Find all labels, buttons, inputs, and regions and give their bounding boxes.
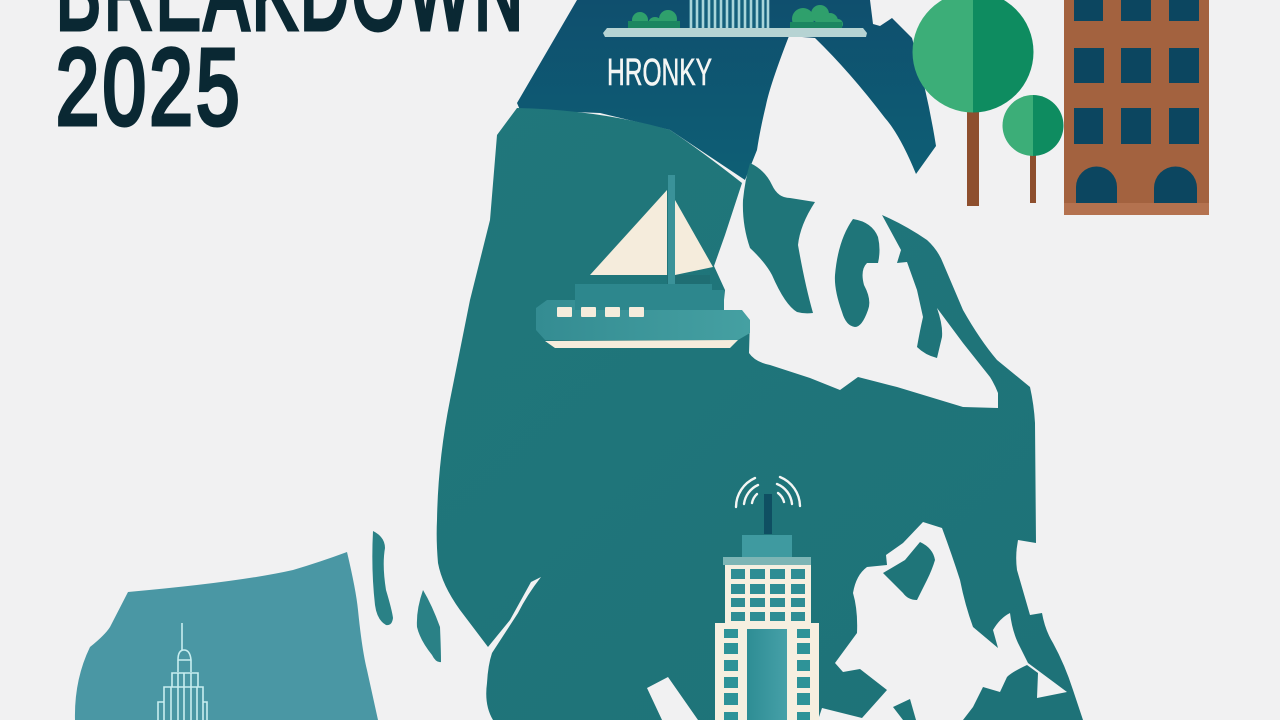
hull [536,300,750,340]
icon: tower with signal [715,477,819,720]
icon: ship with sail [536,175,750,348]
map: small western island [372,531,393,625]
map: white river strip [647,677,698,720]
cabin [575,284,724,312]
terrace slab [603,28,867,37]
map: island two [835,219,880,327]
map: lagoon [883,542,935,600]
map: southwest region [75,552,378,720]
upper body [725,565,811,625]
windows [557,307,644,317]
mast [668,175,675,284]
map: small inlet [893,699,916,720]
icon: tree small [1003,95,1063,203]
bushes left [628,10,680,31]
map: central white island [818,522,1067,720]
map: small western island lower [417,590,441,662]
ledge [723,557,811,565]
left sail [590,190,667,275]
icon: top terrace with building [603,0,867,37]
signal arcs [736,477,800,507]
label on map: HRONKY [607,52,712,94]
icon: brick building [1064,0,1209,215]
icon: outlined skyscraper [158,623,207,720]
bushes right [790,5,843,30]
lower body [715,623,819,720]
right sail [675,200,713,275]
map: main teal landmass [437,108,1083,720]
side windows [724,629,810,720]
upper windows [731,569,805,621]
upper deck [667,275,710,284]
icon: tree large [912,0,1033,206]
crown [742,535,792,557]
keel stripe [545,340,738,348]
map: island one [743,163,815,313]
colonnade building [689,0,769,28]
center panel [747,629,787,720]
antenna [764,494,772,534]
title [56,0,526,147]
map: northern dark region [517,0,936,180]
title: 2025 [56,26,243,147]
